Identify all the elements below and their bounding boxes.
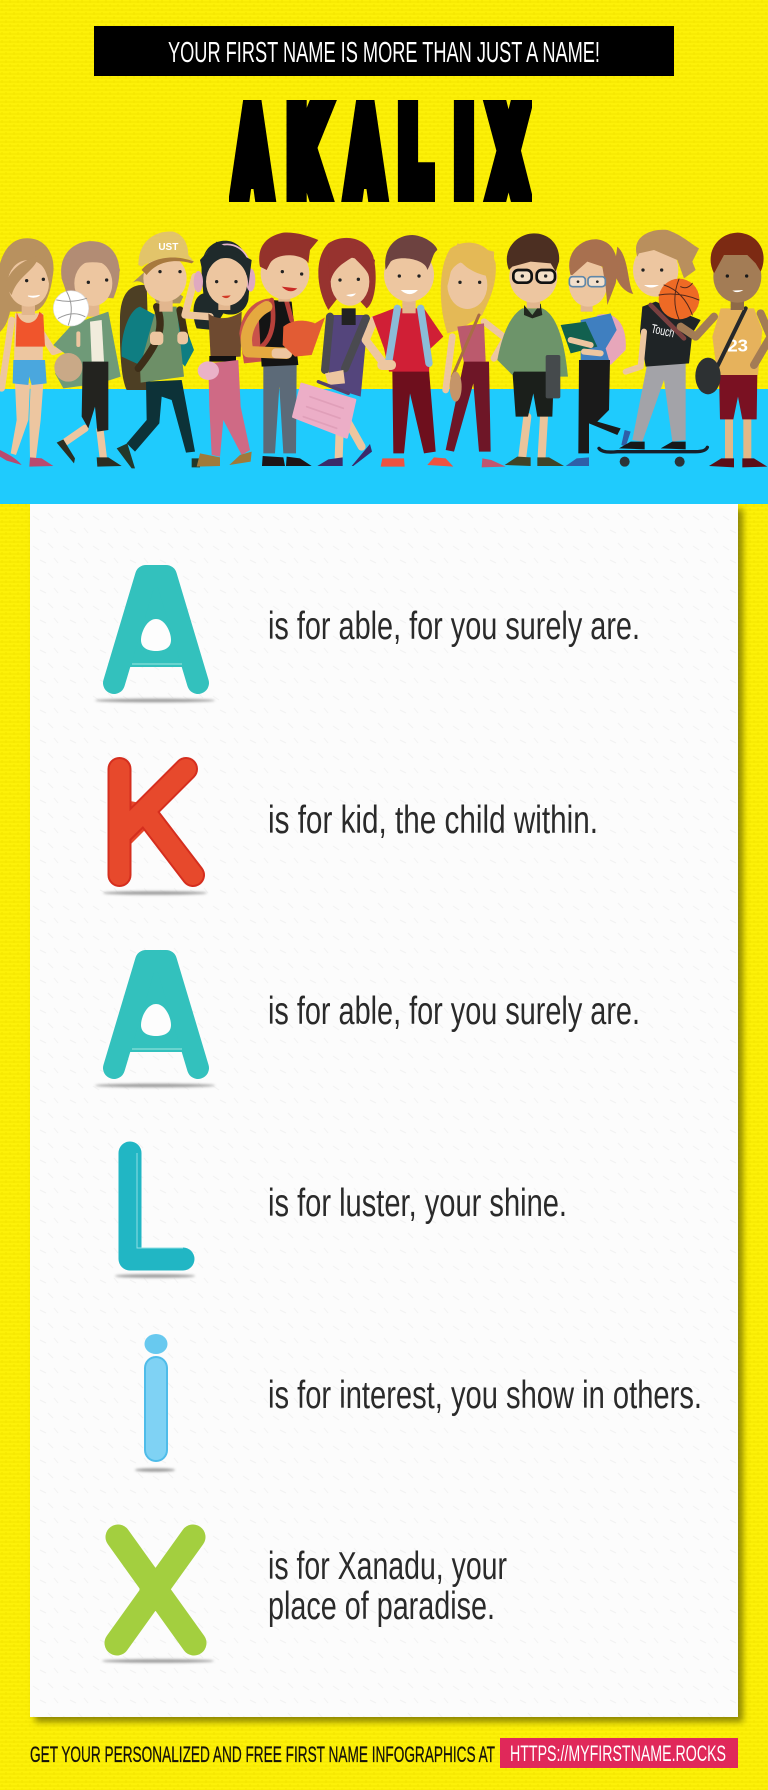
person: blonde girl xyxy=(441,243,506,467)
person: boy on skateboard with basketball: Touch xyxy=(650,322,676,340)
icon: teal letter L xyxy=(115,1153,195,1278)
icon: teal letter A xyxy=(95,576,215,702)
description text: is for Xanadu, your xyxy=(268,1545,507,1588)
person: girl with pink bag xyxy=(293,238,376,466)
row: letter L (luster) xyxy=(115,1153,567,1278)
person: girl with headphones xyxy=(185,241,255,467)
person: girl in orange top xyxy=(0,238,78,467)
blue floor band xyxy=(0,389,768,504)
icon: teal letter A xyxy=(95,961,215,1087)
person: boy with tank top and shoulder bag xyxy=(681,233,768,467)
row: letter L (luster): is for luster, your shine. xyxy=(268,1182,567,1225)
title: name: AKALIX xyxy=(236,90,524,217)
icon: red letter K xyxy=(103,769,207,895)
person: boy on skateboard with basketball xyxy=(599,230,707,467)
illustration: group of young people, right half xyxy=(366,230,768,467)
person: girl with volleyball xyxy=(53,241,122,467)
panel: white letters card xyxy=(30,504,738,1717)
icon: green letter X xyxy=(102,1537,214,1663)
description text: place of paradise. xyxy=(268,1585,495,1628)
person: boy with cap and backpack xyxy=(117,231,200,468)
row: letter X (Xanadu) xyxy=(102,1537,507,1663)
row: letter A (able): is for able, for you surely are. xyxy=(268,605,640,648)
person: boy reading a book xyxy=(239,233,325,466)
illustration: group of young people, left half xyxy=(0,231,376,468)
row: letter K (kid): is for kid, the child within. xyxy=(268,799,598,842)
row: letter A (able) xyxy=(95,576,640,702)
icon: blue letter i xyxy=(135,1334,175,1472)
person: boy with glasses xyxy=(497,233,568,466)
row: letter K (kid) xyxy=(103,769,598,895)
row: letter A (able), repeated xyxy=(95,961,640,1087)
person: boy in red shirt xyxy=(366,235,453,467)
row: letter A (able), repeated: is for able, for you surely are. xyxy=(268,990,640,1033)
person: boy with tank top and shoulder bag: 23 xyxy=(727,336,748,356)
person: girl with tablet and backpack xyxy=(561,239,633,466)
banner: tagline xyxy=(94,26,674,76)
row: letter i (interest) xyxy=(135,1334,702,1472)
person: boy with cap and backpack: UST xyxy=(158,242,178,253)
footer call to action: GET YOUR PERSONALIZED AND FREE FIRST NAME INFOGRAPHICS AT xyxy=(30,1742,495,1767)
description text xyxy=(268,1545,507,1628)
